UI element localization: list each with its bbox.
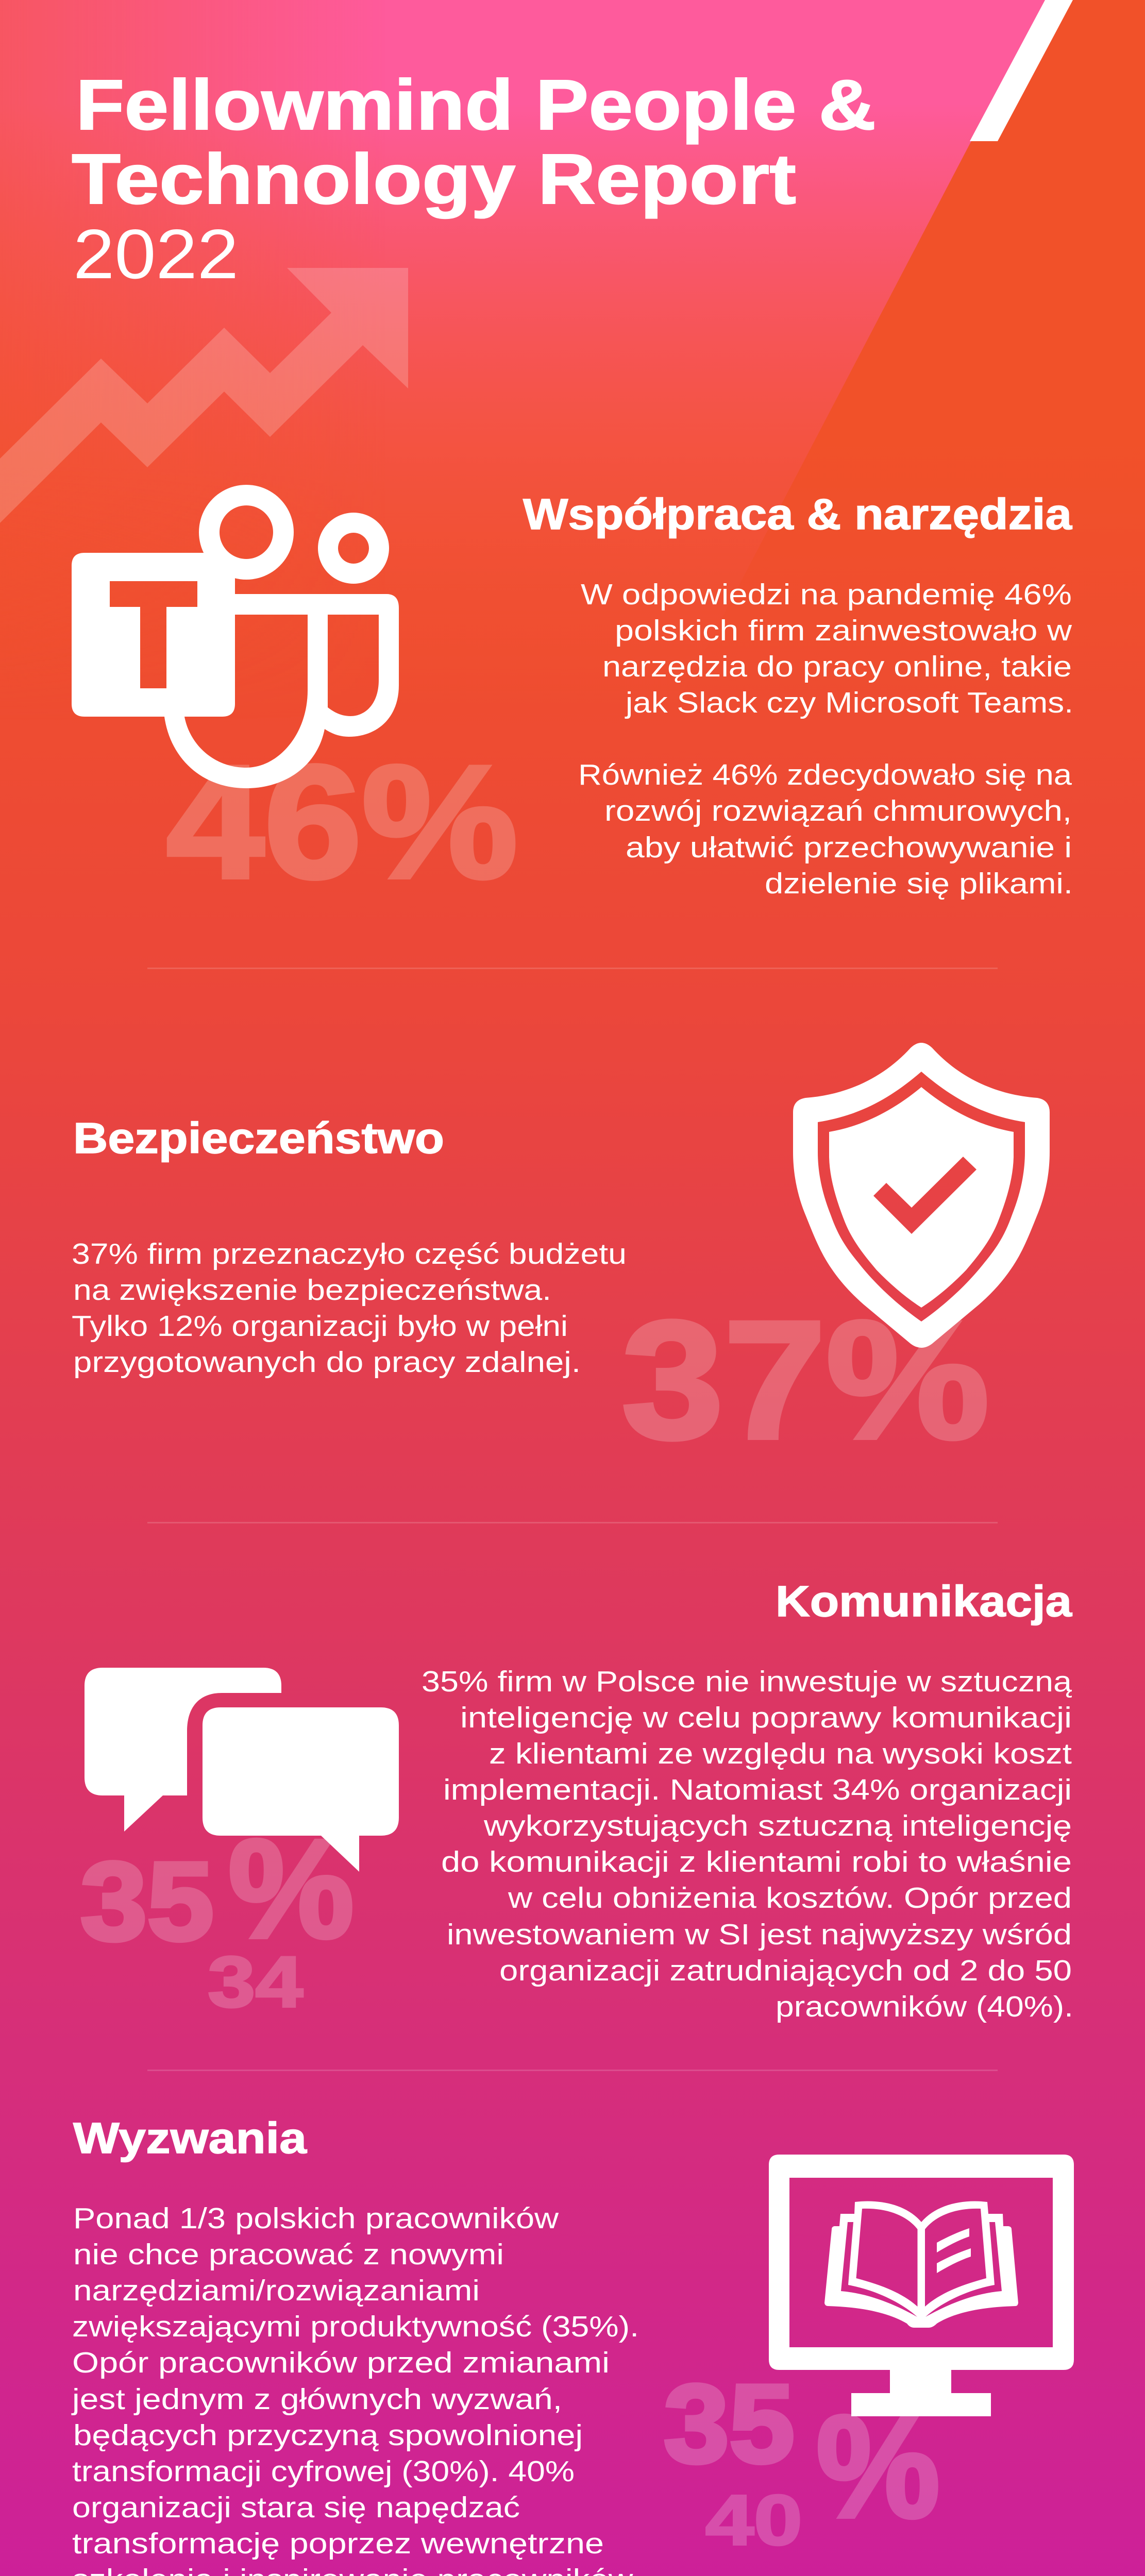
section: Współpraca & narzędzia [72,485,1073,912]
body text: narzędzia do pracy online, takie [602,650,1072,683]
body text [71,2202,641,2576]
body text: Opór pracowników przed zmianami [72,2346,610,2379]
heading: Bezpieczeństwo [73,1114,444,1162]
body text: organizacji zatrudniających od 2 do 50 [499,1954,1072,1987]
body text: do komunikacji z klientami robi to właśnie [441,1845,1072,1878]
big numbers 35% and 40 [664,2361,940,2560]
body text: przygotowanych do pracy zdalnej. [73,1346,581,1379]
body text [578,578,1073,900]
body text: transformacji cyfrowej (30%). 40% [72,2455,575,2488]
section: Bezpieczeństwo [72,1043,1050,1474]
title: 2022 [73,215,239,293]
body text: aby ułatwić przechowywanie i [626,831,1072,864]
icon: rising arrow [0,268,408,523]
title: Technology Report [72,140,796,219]
icon: monitor with book [769,2155,1074,2416]
icon: Microsoft Teams [72,485,399,788]
body text: zwiększającymi produktywność (35%). [72,2310,639,2343]
icon: speech bubbles [85,1668,399,1872]
body text: na zwiększenie bezpieczeństwa. [73,1274,551,1307]
body text: organizacji stara się napędzać [72,2491,520,2524]
body text: nie chce pracować z nowymi [73,2238,504,2271]
body text: 37% firm przeznaczyło część budżetu [72,1238,627,1270]
big numbers 35% and 40: % [816,2385,940,2548]
body text: rozwój rozwiązań chmurowych, [604,794,1072,827]
section: Wyzwania [71,2114,1074,2576]
big numbers 35% and 40: 40 [705,2481,802,2560]
body text: jak Slack czy Microsoft Teams. [625,686,1073,719]
title: Fellowmind People & [76,65,876,145]
body text: będących przyczyną spowolnionej [73,2419,583,2452]
white diagonal stripe [970,0,1073,141]
body text [72,1238,627,1379]
body text: inteligencję w celu poprawy komunikacji [460,1701,1072,1734]
header panel [0,0,1073,553]
body text: Ponad 1/3 polskich pracowników [73,2202,559,2235]
heading: Wyzwania [73,2114,307,2162]
body text: 35% firm w Polsce nie inwestuje w sztuczną [422,1665,1072,1698]
big numbers 35% and 40: 35 [664,2361,795,2486]
icon: shield with check [793,1043,1050,1348]
body text: z klientami ze względu na wysoki koszt [489,1737,1072,1770]
big number 37%: 37% [621,1286,989,1474]
big numbers 35% and 34: 35 [80,1839,214,1963]
body text [422,1665,1073,2023]
heading: Komunikacja [776,1577,1072,1625]
title [72,65,876,293]
body text: wykorzystujących sztuczną inteligencję [483,1809,1072,1842]
body text: W odpowiedzi na pandemię 46% [581,578,1072,611]
big number 46%: 46% [166,733,518,912]
body text: pracowników (40%). [776,1990,1073,2023]
body text: w celu obniżenia kosztów. Opór przed [508,1882,1072,1914]
body text: polskich firm zainwestowało w [615,614,1072,647]
heading: Współpraca & narzędzia [523,490,1072,538]
big numbers 35% and 34 [80,1810,354,2022]
body text: jest jednym z głównych wyzwań, [71,2383,562,2416]
body text: Tylko 12% organizacji było w pełni [72,1310,568,1343]
body text: transformację poprzez wewnętrzne [72,2527,604,2560]
big numbers 35% and 34: % [228,1810,354,1967]
body text: dzielenie się plikami. [765,867,1073,900]
body text: narzędziami/rozwiązaniami [73,2274,480,2307]
body text: inwestowaniem w SI jest najwyższy wśród [447,1918,1072,1951]
big numbers 35% and 34: 34 [208,1941,303,2022]
pink diagonal panel [0,0,1045,553]
body text: implementacji. Natomiast 34% organizacji [443,1773,1072,1806]
section: Komunikacja [80,1577,1073,2023]
body text: Również 46% zdecydowało się na [578,758,1072,791]
